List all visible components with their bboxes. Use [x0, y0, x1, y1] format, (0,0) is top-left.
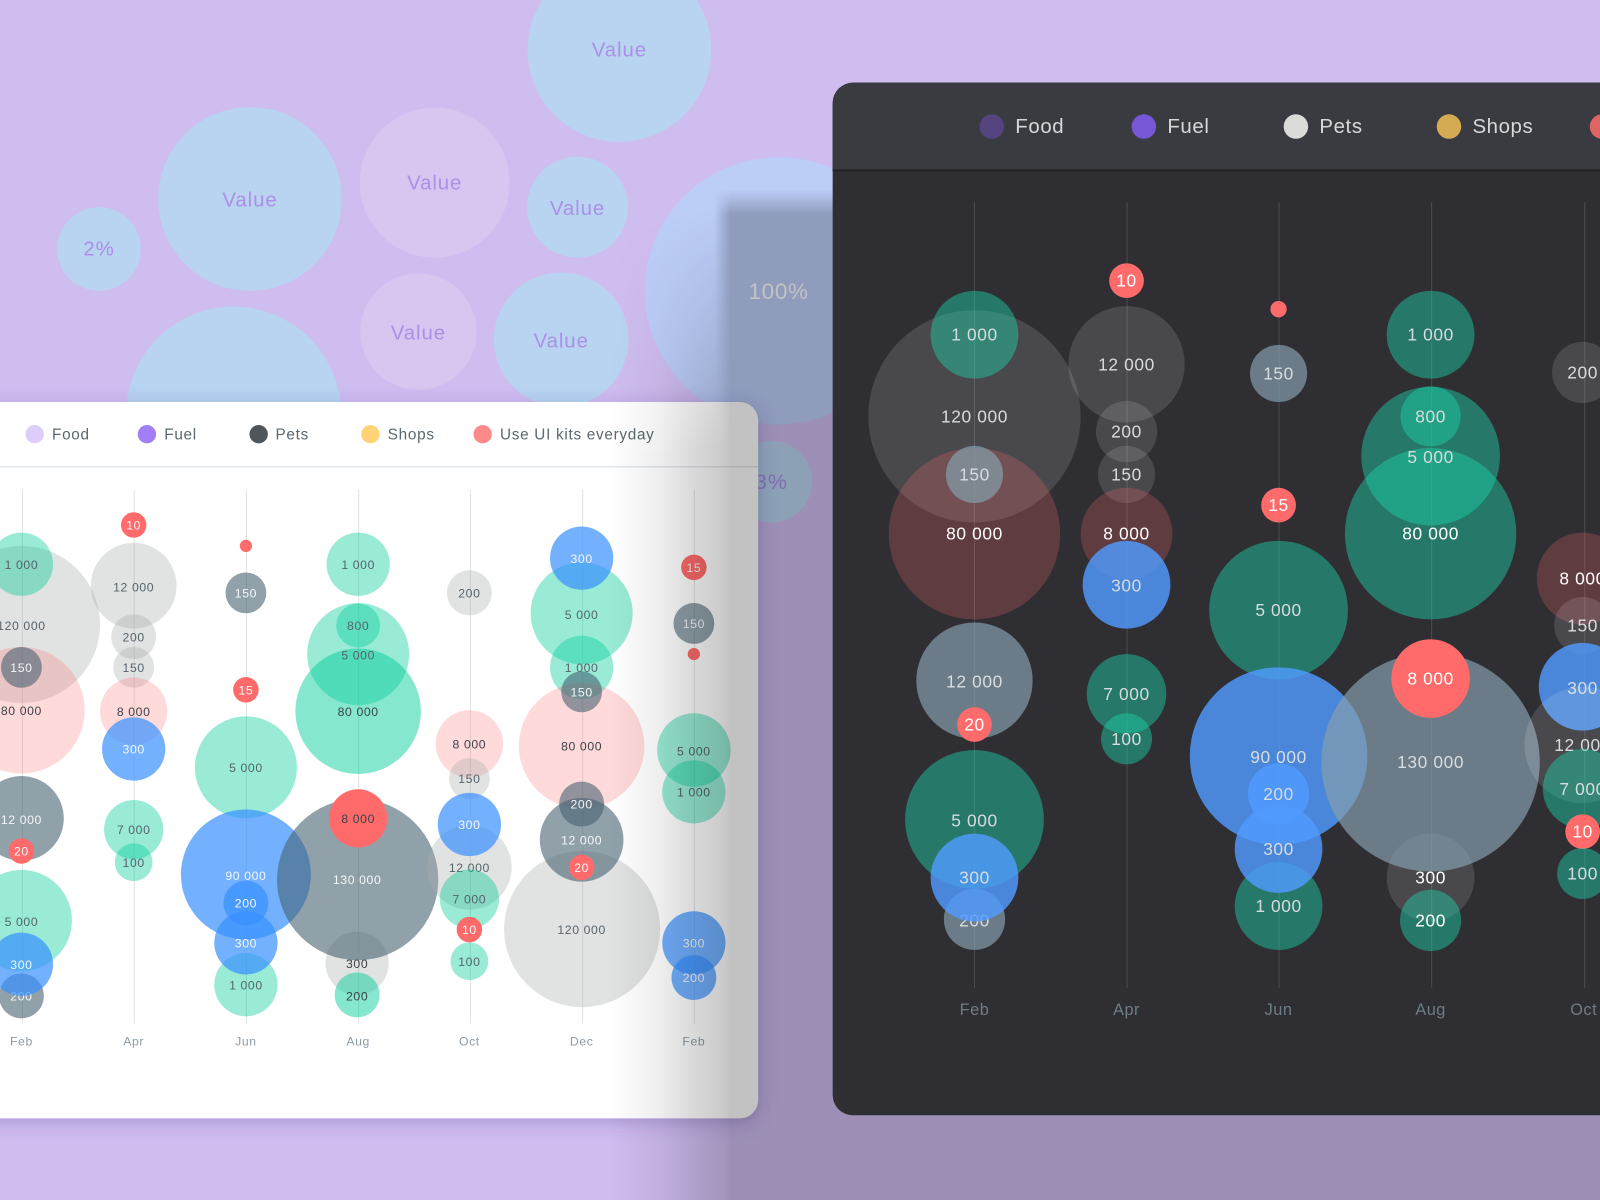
column: Oct: 100 [458, 955, 481, 969]
column: Oct: 300 [1567, 678, 1598, 698]
column: Jun: 150 [235, 586, 257, 600]
x axis months: Apr [123, 1034, 144, 1048]
column: Apr: 8 000 [1103, 524, 1150, 544]
column: Feb: 12 000 [1, 813, 42, 827]
legend item: food: Food [52, 426, 90, 443]
bubble: 3 percent [731, 441, 812, 522]
column: Feb: 300 [10, 958, 33, 972]
column: Apr: 7 000 [1103, 684, 1150, 704]
legend [26, 425, 655, 443]
x axis months: Oct [459, 1034, 480, 1048]
legend item: food [26, 425, 90, 443]
panel: dark chart [833, 83, 1600, 1115]
column: Aug: 1 000 [341, 558, 375, 572]
column: Aug: 800 [1415, 406, 1446, 426]
column: Dec: 200 [571, 798, 593, 812]
legend item: fuel [1132, 114, 1209, 139]
legend item: fuel: Fuel [164, 426, 197, 443]
bubble: value top: Value [592, 40, 647, 62]
panel: light chart [0, 402, 758, 1118]
column: Apr: 12 000 [113, 580, 154, 594]
x axis months: Jun [235, 1034, 257, 1048]
column: Dec: 300 [571, 552, 593, 566]
legend item: pets: Pets [1319, 116, 1363, 138]
bubble: large behind panel [126, 307, 341, 522]
column: Feb: 20 [14, 845, 29, 859]
legend item: fuel: Fuel [1167, 116, 1209, 138]
column: Feb next year: 15 [686, 561, 701, 575]
column: Oct: 8 000 [453, 737, 486, 751]
column: Apr: 300 [1111, 576, 1142, 596]
column: Apr [1068, 263, 1185, 764]
column: Oct: 12 000 [449, 861, 490, 875]
column: Jun: 15 [238, 683, 253, 697]
column: Oct: 10 [1572, 822, 1593, 842]
legend item: food [980, 114, 1064, 139]
column: Apr: 150 [1111, 464, 1142, 484]
background bubbles [57, 0, 912, 522]
legend item: use UI kits: Use UI kits everyday [500, 426, 655, 443]
bubble: 2 percent: 2% [83, 239, 115, 261]
column: Aug [1321, 291, 1540, 951]
column: Dec: 150 [571, 685, 593, 699]
legend item: pets: Pets [276, 426, 309, 443]
bubble: value left [158, 107, 342, 291]
column: Aug [277, 533, 438, 1017]
column: Jun: 1 000 [229, 978, 263, 992]
column: Jun: 90 000 [225, 869, 266, 883]
column: Dec: 1 000 [565, 661, 598, 675]
column: Oct [427, 570, 512, 980]
x axis months: Feb [10, 1034, 33, 1048]
x axis months: Apr [1113, 1001, 1140, 1019]
bubble: value pink lower: Value [391, 322, 446, 344]
column: Apr: 200 [123, 630, 145, 644]
column: Apr: 100 [1111, 729, 1142, 749]
column: Jun: 300 [1263, 839, 1294, 859]
column: Apr: 10 [126, 519, 141, 533]
column: Dec: 80 000 [561, 740, 602, 754]
column: Oct: 150 [458, 772, 481, 786]
column: Aug: 8 000 [1407, 669, 1454, 689]
bubble: 2 percent [57, 207, 141, 291]
column: Feb: 200 [959, 910, 990, 930]
column: Jun: 200 [1263, 784, 1294, 804]
column: Feb: 20 [964, 714, 985, 734]
column: Apr [91, 512, 177, 881]
column: Aug: 5 000 [341, 649, 375, 663]
column: Dec: 5 000 [565, 608, 598, 622]
shadow cast by dark panel [610, 190, 1600, 1200]
column: Jun: 300 [235, 936, 257, 950]
legend item: pets [1284, 114, 1363, 139]
bubble: 3 percent: 3% [755, 470, 788, 494]
column: Dec [504, 527, 660, 1007]
bubble: value pink upper: Value [407, 172, 462, 194]
column: Feb next year: 5 000 [677, 745, 711, 759]
column: Dec: 12 000 [561, 833, 602, 847]
column: Aug: 800 [347, 619, 369, 633]
column: Jun: 200 [235, 897, 257, 911]
column: Feb: 200 [10, 990, 33, 1004]
bubble: value lower [494, 272, 629, 407]
column: Feb: 5 000 [5, 915, 38, 929]
column: Feb: 12 000 [946, 672, 1003, 692]
column: Feb next year: 150 [683, 617, 705, 631]
column: Apr: 300 [123, 743, 145, 757]
column: Apr: 10 [1116, 271, 1137, 291]
legend item: shops [1437, 114, 1533, 139]
bubble: value left: Value [222, 190, 278, 212]
legend item: shops: Shops [1472, 116, 1533, 138]
column: Jun: 15 [1268, 495, 1289, 515]
legend item: fuel [138, 425, 197, 443]
panel surface [0, 402, 758, 1118]
column: Feb: 150 [10, 661, 33, 675]
column: Feb: 1 000 [951, 325, 998, 345]
column: Feb next year [657, 555, 731, 1000]
x axis months: Feb [960, 1001, 989, 1019]
legend item: shops [361, 425, 435, 443]
x axis months: Jun [1265, 1001, 1292, 1019]
column: Oct [1524, 342, 1600, 899]
column: Apr: 8 000 [117, 705, 151, 719]
legend item: food: Food [1015, 116, 1064, 138]
column: Oct: 7 000 [453, 893, 486, 907]
legend bar [833, 83, 1600, 171]
column: Feb: 80 000 [1, 704, 42, 718]
bubble: value top [528, 0, 711, 142]
column: Oct: 200 [458, 586, 481, 600]
column: Aug: 130 000 [1397, 752, 1464, 772]
column: Feb: 120 000 [941, 406, 1008, 426]
column: Feb: 300 [959, 868, 990, 888]
column: Dec: 20 [574, 861, 589, 875]
column: Oct: 150 [1567, 616, 1598, 636]
column: Jun: 1 000 [1255, 896, 1302, 916]
x axis months: Oct [1570, 1001, 1597, 1019]
column: Feb: 150 [959, 464, 990, 484]
x axis months [960, 1001, 1597, 1019]
x axis months: Dec [570, 1034, 593, 1048]
column: Feb [868, 291, 1081, 950]
column: Aug: 200 [346, 990, 368, 1004]
column: Apr: 100 [123, 856, 145, 870]
bubble: value pink upper [360, 108, 510, 258]
column: Aug: 130 000 [333, 873, 381, 887]
column: Aug: 80 000 [1402, 524, 1459, 544]
panel surface [833, 83, 1600, 1115]
column: Feb: 1 000 [5, 558, 38, 572]
bubble: 100 percent [645, 157, 912, 424]
bubble: value small: Value [550, 198, 605, 220]
column: Aug: 300 [346, 957, 368, 971]
column: Jun: 5 000 [229, 761, 263, 775]
column: Aug: 200 [1415, 910, 1446, 930]
bubble: value small [527, 157, 628, 258]
column: Apr: 200 [1111, 422, 1142, 442]
x axis months: Aug [1415, 1001, 1446, 1019]
x axis months: Aug [346, 1034, 370, 1048]
column: Oct: 200 [1567, 362, 1598, 382]
column: Aug: 80 000 [338, 705, 379, 719]
column: Feb next year: 1 000 [677, 785, 711, 799]
column: Aug: 300 [1415, 868, 1446, 888]
legend item: shops: Shops [388, 426, 435, 443]
column: Jun [181, 540, 311, 1016]
column: Dec: 120 000 [557, 923, 606, 937]
bubble: value lower: Value [534, 330, 589, 352]
column: Oct: 100 [1567, 863, 1598, 883]
column: Jun: 5 000 [1255, 600, 1302, 620]
column: Aug: 8 000 [341, 812, 375, 826]
column: Jun: 150 [1263, 363, 1294, 383]
legend item: pets [249, 425, 309, 443]
column: Feb [0, 533, 100, 1018]
column: Feb next year: 300 [683, 936, 705, 950]
column: Apr: 150 [123, 661, 145, 675]
column: Apr: 7 000 [117, 823, 151, 837]
x axis months [10, 1034, 705, 1048]
column: Oct: 10 [462, 923, 477, 937]
column: Feb: 5 000 [951, 810, 998, 830]
column: Aug: 1 000 [1407, 325, 1454, 345]
column: Jun: 90 000 [1250, 747, 1307, 767]
column: Feb next year: 200 [683, 971, 705, 985]
bubble: value pink lower [360, 273, 477, 390]
column: Jun [1190, 301, 1367, 950]
legend item: use UI kits [1590, 114, 1600, 139]
column: Oct: 300 [458, 818, 481, 832]
column: Feb: 80 000 [946, 524, 1003, 544]
x axis months: Feb [682, 1034, 705, 1048]
bubble: 100 percent: 100% [748, 279, 809, 304]
column: Aug: 5 000 [1407, 447, 1454, 467]
column: Apr: 12 000 [1098, 354, 1155, 374]
